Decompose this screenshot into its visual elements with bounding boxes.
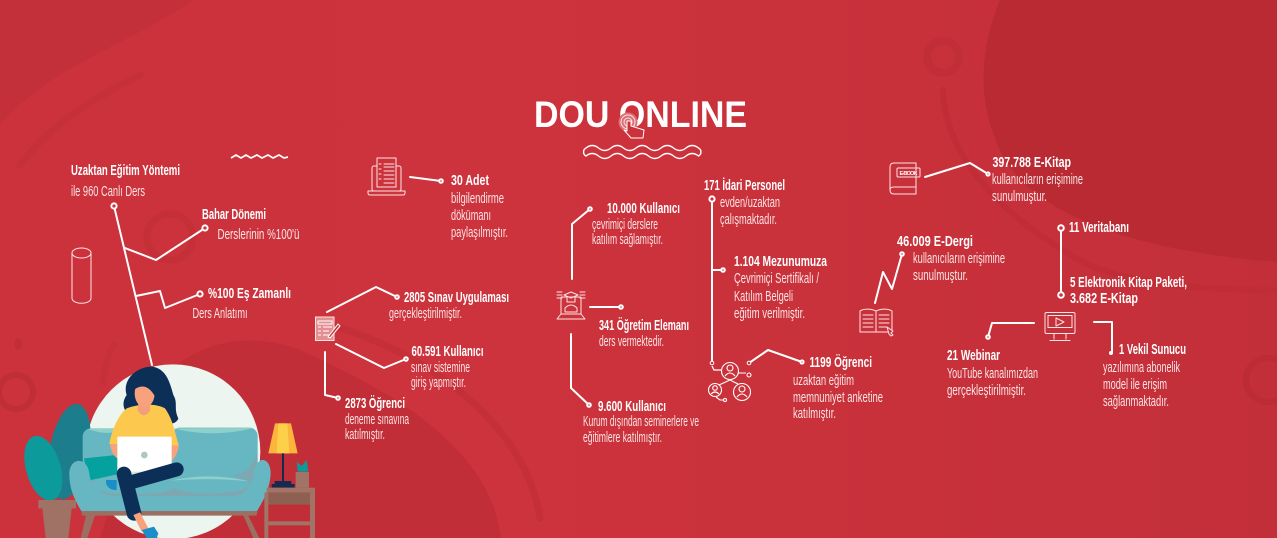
text: 2873 students: 2873 Öğrenci (345, 395, 405, 412)
icon: exam sheet (316, 317, 340, 340)
sofa (69, 428, 271, 538)
text: 46.009 e-journals: 46.009 E-Dergi (897, 233, 973, 250)
text: 341 lecturers: 341 Öğretim Elemanı (599, 317, 689, 334)
plants (17, 401, 97, 538)
text: 1199 students: katılmıştır. (793, 406, 836, 422)
text: proxy server: model ile erişim (1103, 377, 1167, 393)
icon: e-book: E-BOOK (900, 171, 918, 177)
text: spring term: Bahar Dönemi (202, 206, 266, 223)
text: 171 admin staff: 171 İdari Personel (704, 177, 785, 194)
panel: e-journals (860, 233, 1005, 336)
text: proxy server: sağlanmaktadır. (1103, 394, 1169, 410)
text: 30 documents (451, 172, 508, 241)
connector line (925, 163, 988, 177)
text: 21 webinars: gerçekleştirilmiştir. (947, 383, 1026, 399)
text: synchronous: %100 Eş Zamanlı (208, 285, 291, 302)
illustration: woman on sofa (17, 364, 315, 538)
woman (106, 367, 179, 538)
panel: databases and webinars (947, 219, 1187, 410)
connector lines (571, 207, 623, 407)
panel: documents (368, 158, 508, 241)
connector lines (111, 203, 208, 365)
text: distance education method (71, 162, 180, 200)
icon: cylinder (72, 248, 91, 303)
text: proxy server: yazılımına abonelik (1103, 360, 1180, 376)
icon: video screen (1045, 312, 1075, 340)
text: 2805 exams (389, 289, 509, 322)
text: 2873 students: katılmıştır. (345, 427, 385, 443)
text: 46.009 e-journals: sunulmuştur. (913, 268, 968, 284)
text: e-book packages: 5 Elektronik Kitap Paketi, (1070, 274, 1187, 291)
text: synchronous: Ders Anlatımı (192, 306, 248, 322)
text: 171 admin staff: evden/uzaktan (720, 195, 780, 211)
text: 60.591 users: sınav sistemine (411, 360, 470, 376)
text: proxy server: 1 Vekil Sunucu (1119, 341, 1186, 358)
text: 21 webinars (947, 347, 1038, 399)
panel: distance education (71, 162, 300, 365)
text: 171 admin staff (704, 177, 785, 228)
panel: online lectures (557, 200, 699, 446)
text: 1.104 graduates: Katılım Belgeli (734, 289, 793, 305)
text: 30 documents: 30 Adet (451, 172, 489, 189)
icon: touch hand (618, 112, 644, 138)
text: 1.104 graduates: 1.104 Mezunumuza (734, 253, 827, 270)
text: 2873 students (345, 395, 410, 443)
text: 397.788 e-books: sunulmuştur. (992, 189, 1047, 205)
text: 9.600 users: eğitimlere katılmıştır. (583, 430, 662, 446)
text: 9.600 users: 9.600 Kullanıcı (598, 398, 666, 415)
text: 341 lecturers (599, 317, 689, 350)
text: 10.000 users (592, 200, 680, 248)
text: spring term (202, 206, 300, 243)
icon: open book (860, 309, 893, 336)
text: 397.788 e-books: 397.788 E-Kitap (992, 154, 1071, 171)
panel: staff and graduates (704, 177, 883, 422)
wavy underline (584, 146, 701, 158)
text: 1199 students: uzaktan eğitim (793, 373, 854, 389)
text: 30 documents: bilgilendirme (451, 191, 504, 207)
text: 60.591 users: giriş yapmıştır. (411, 375, 466, 391)
text: proxy server (1103, 341, 1186, 410)
text: 21 webinars: YouTube kanalımızdan (947, 366, 1038, 382)
text: 1199 students (793, 354, 883, 422)
text: 21 webinars: 21 Webinar (947, 347, 1000, 364)
text: 341 lecturers: ders vermektedir. (599, 334, 664, 350)
panel: e-books (890, 154, 1083, 205)
panel: exams (316, 287, 509, 443)
white circle (86, 364, 260, 538)
icon: graduate laptop (557, 292, 585, 319)
text: 30 documents: paylaşılmıştır. (451, 225, 508, 241)
text: 1.104 graduates: eğitim verilmiştir. (734, 306, 805, 322)
text: e-book packages (1070, 274, 1187, 307)
connector line (410, 177, 441, 181)
icon: laptop with document (368, 158, 405, 195)
text: 60.591 users (411, 343, 484, 391)
text: 1199 students: 1199 Öğrenci (810, 354, 872, 371)
text: 11 databases: 11 Veritabanı (1069, 219, 1129, 236)
title: DOU ONLINE (534, 93, 747, 135)
lamp (268, 423, 298, 488)
icon: e-book (890, 163, 920, 194)
text: 60.591 users: 60.591 Kullanıcı (412, 343, 484, 360)
text: 2805 exams: 2805 Sınav Uygulaması (404, 289, 509, 306)
text: e-book packages: 3.682 E-Kitap (1070, 290, 1138, 307)
text: 10.000 users: katılım sağlamıştır. (592, 232, 663, 248)
text: 46.009 e-journals: kullanıcıların erişimine (913, 251, 1005, 267)
connector line (875, 254, 902, 303)
text: 10.000 users: 10.000 Kullanıcı (607, 200, 680, 217)
connector lines (986, 225, 1112, 354)
text: 171 admin staff: çalışmaktadır. (720, 212, 777, 228)
text: spring term: Derslerinin %100'ü (218, 227, 300, 243)
text: 9.600 users (583, 398, 699, 446)
side table (264, 460, 315, 538)
text: 2805 exams: gerçekleştirilmiştir. (389, 306, 462, 322)
text: 1.104 graduates: Çevrimiçi Sertifikalı / (734, 271, 820, 287)
text: 9.600 users: Kurum dışından seminerlere ve (583, 414, 699, 430)
connector lines (709, 196, 804, 370)
text: 2873 students: deneme sınavına (345, 412, 410, 428)
text: 397.788 e-books (992, 154, 1083, 205)
text: 397.788 e-books: kullanıcıların erişimine (992, 172, 1083, 188)
decorative zigzag (231, 155, 288, 158)
connector lines (325, 287, 408, 400)
text: 1.104 graduates (734, 253, 827, 322)
text: 1199 students: memnuniyet anketine (793, 390, 883, 406)
text: distance education method: Uzaktan Eğitim Yöntemi (71, 162, 180, 179)
text: 30 documents: dökümanı (451, 208, 491, 224)
text: 46.009 e-journals (897, 233, 1005, 284)
text: distance education method: ile 960 Canlı Ders (71, 184, 145, 200)
text: synchronous (192, 285, 291, 322)
icon: people network (708, 362, 751, 402)
text: 10.000 users: çevrimiçi derslere (592, 217, 658, 233)
